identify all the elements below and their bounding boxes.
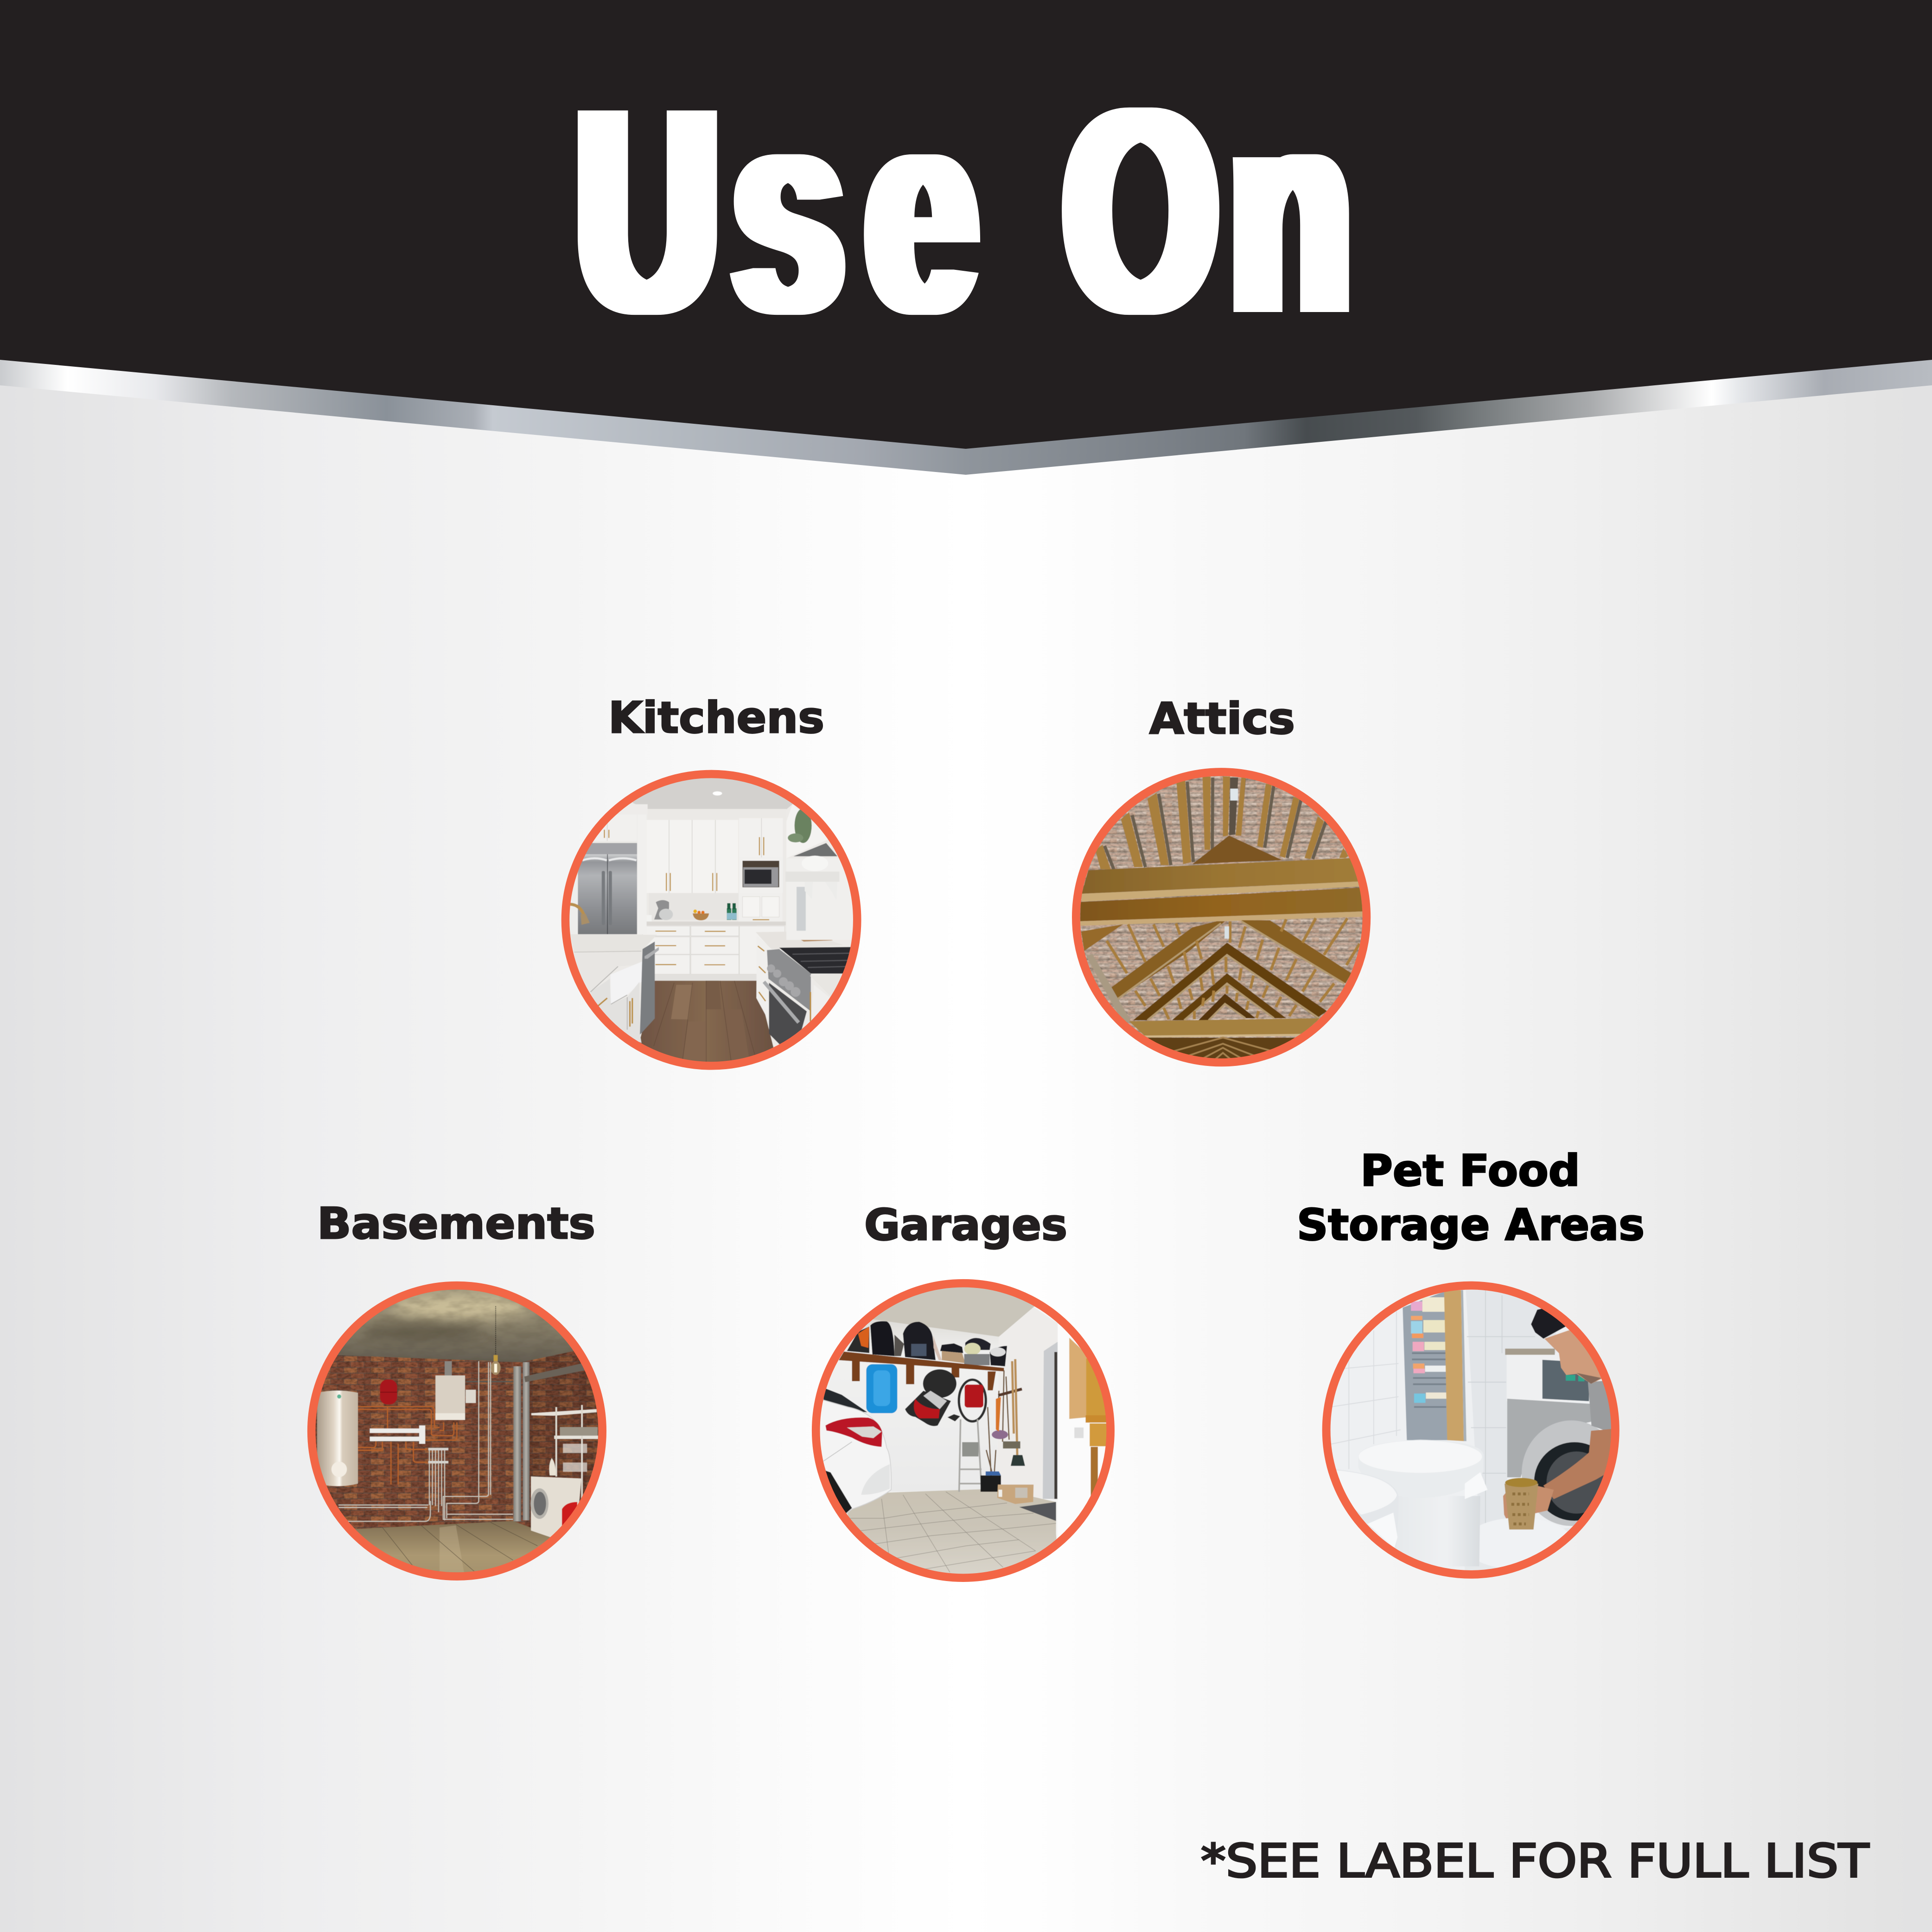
upper rafter shadows xyxy=(1104,778,1326,869)
kibble cup xyxy=(1505,1478,1538,1530)
label: Basements: Basements xyxy=(317,1199,595,1249)
ring xyxy=(1326,1286,1615,1575)
manifold xyxy=(370,1425,425,1444)
label: Pet Food Storage Areas: Pet Food xyxy=(1360,1146,1580,1196)
label: Pet Food Storage Areas xyxy=(1297,1146,1645,1250)
ducts xyxy=(513,1362,585,1521)
footnote: *SEE LABEL FOR FULL LIST xyxy=(1201,1835,1869,1888)
shelving xyxy=(531,1405,598,1499)
label: Garages: Garages xyxy=(864,1200,1067,1250)
right tiles xyxy=(1466,1290,1556,1527)
ring xyxy=(1076,772,1366,1063)
copper pipes xyxy=(358,1407,457,1485)
stroller xyxy=(905,1369,956,1426)
photo circle: attic xyxy=(1062,758,1382,1078)
photo circle: kitchen xyxy=(561,770,861,1070)
tools xyxy=(981,1359,1025,1492)
man xyxy=(1503,1307,1614,1523)
ring xyxy=(816,1283,1110,1578)
step ladder xyxy=(959,1419,982,1492)
upper beam xyxy=(1082,858,1359,902)
upper rafters xyxy=(1096,777,1348,869)
photo circle: pet food storage xyxy=(1307,1270,1632,1595)
metallic chevron band xyxy=(0,357,1932,475)
label: Kitchens: Kitchens xyxy=(608,693,824,743)
boiler xyxy=(435,1361,513,1420)
label: Attics: Attics xyxy=(1149,694,1295,744)
floor xyxy=(346,1521,562,1590)
label: Pet Food Storage Areas: Storage Areas xyxy=(1297,1200,1645,1250)
ceiling xyxy=(297,1270,617,1366)
island xyxy=(570,934,659,1043)
washing machine xyxy=(1505,1349,1621,1526)
washer xyxy=(530,1458,581,1537)
bags on shelf xyxy=(847,1321,1007,1366)
hanging lamp xyxy=(491,1306,501,1375)
white car xyxy=(819,1388,891,1514)
blue sled xyxy=(866,1364,897,1413)
ceiling xyxy=(632,778,793,810)
cardboard box xyxy=(997,1485,1033,1504)
water tank xyxy=(317,1390,358,1486)
photo circle: basement xyxy=(297,1270,617,1590)
ring xyxy=(312,1286,602,1576)
large bucket xyxy=(1358,1440,1487,1566)
silver pipes xyxy=(338,1361,513,1521)
range xyxy=(764,947,852,1046)
base cabinets xyxy=(643,925,785,981)
wooden shelf xyxy=(839,1352,1004,1390)
wooden cabinet xyxy=(1069,1338,1107,1496)
brick walls xyxy=(297,1270,617,1590)
expansion vessel xyxy=(380,1379,397,1404)
upper cabinets xyxy=(604,818,783,893)
range hood and shelf xyxy=(785,804,854,940)
plan board xyxy=(1403,1291,1448,1440)
title: Use On xyxy=(577,47,1350,374)
ceiling xyxy=(864,1279,1068,1337)
right wall and door xyxy=(997,1307,1107,1537)
bottom beam xyxy=(1129,1018,1320,1038)
ring xyxy=(565,774,857,1066)
vacuum cleaner xyxy=(948,1380,986,1422)
photo circle: garage xyxy=(803,1270,1123,1590)
header band xyxy=(0,0,1932,449)
refrigerator xyxy=(578,843,637,934)
left bucket xyxy=(1334,1469,1398,1548)
microwave xyxy=(742,861,780,887)
wood floor xyxy=(639,980,774,1062)
lower roof panels xyxy=(1081,918,1359,1023)
left wall xyxy=(815,1311,999,1492)
right counter xyxy=(756,907,843,1021)
faucet xyxy=(570,904,590,925)
bottom rafters xyxy=(1123,1038,1327,1078)
bottom bucket xyxy=(1464,1518,1575,1595)
floor xyxy=(847,1489,1060,1590)
lower beam pair xyxy=(1080,887,1363,926)
countertop items xyxy=(645,900,737,922)
